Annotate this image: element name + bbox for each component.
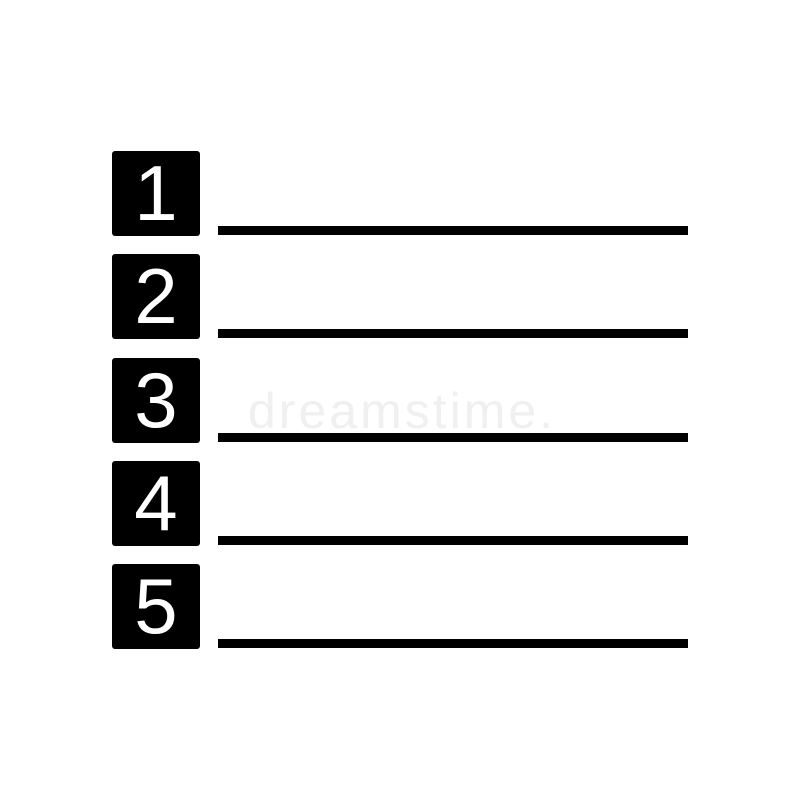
number box 2: 2 [134,252,178,340]
number box 5: 5 [134,562,178,650]
line 5 [218,639,688,648]
list item 4 [112,459,688,547]
number box 3 [112,358,200,443]
list item 2 [112,252,688,340]
list item 5 [112,562,688,650]
number box 4: 4 [134,459,178,547]
line 2 [218,329,688,338]
list item 1 [112,149,688,237]
number box 5 [112,564,200,649]
number box 4 [112,461,200,546]
number box 1: 1 [134,149,178,237]
line 3 [218,433,688,442]
number box 1 [112,151,200,236]
list item 3 [112,356,688,444]
line 4 [218,536,688,545]
line 1 [218,226,688,235]
watermark: dreamstime. [248,383,556,439]
number box 3: 3 [134,356,178,444]
number box 2 [112,254,200,339]
